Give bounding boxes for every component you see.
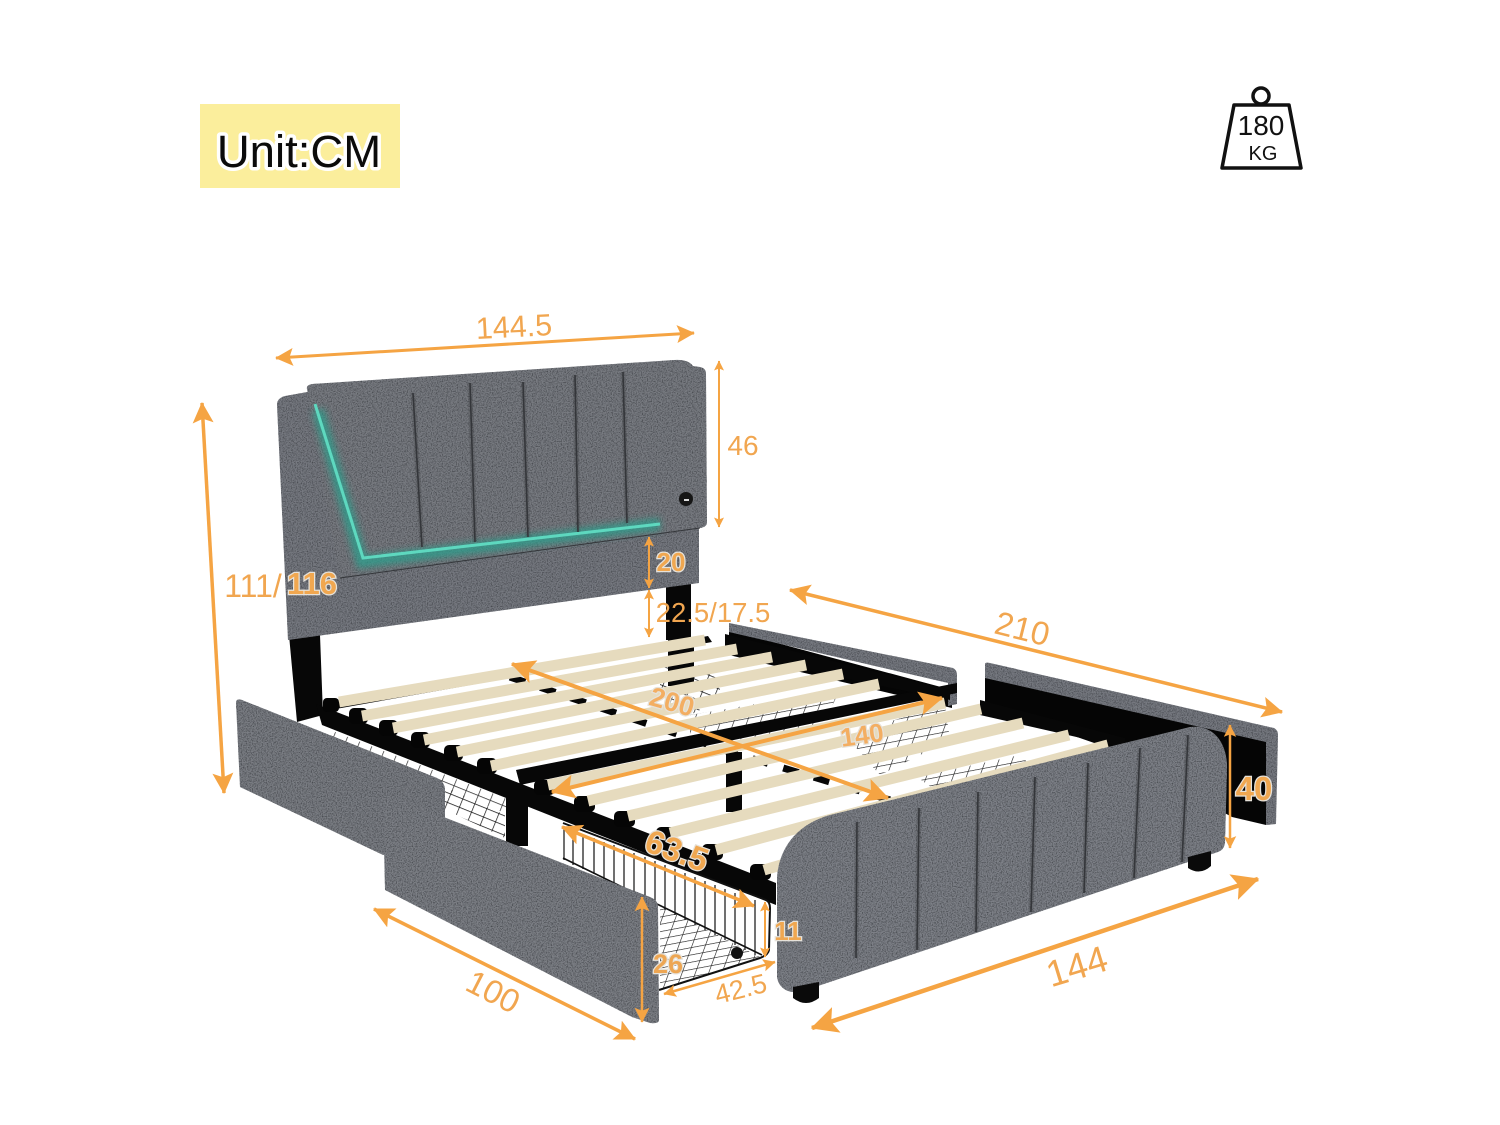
wire drawer basket — [563, 823, 770, 990]
dimension: headboard width 144.5: 144.5 — [475, 308, 553, 346]
wooden slats — [339, 640, 1150, 870]
dimension: inner width 140 — [552, 698, 942, 792]
headboard legs — [289, 578, 742, 812]
dimension: side length 210: 210 — [991, 604, 1054, 653]
dimension: basket length 63.5: 63.5 — [640, 822, 713, 879]
dimension: drawer height 26 — [642, 897, 683, 1022]
dimension: 20 — [649, 537, 685, 588]
unit label — [200, 104, 400, 188]
dimension: footboard width 144: 144 — [1041, 938, 1112, 995]
dimension: clearance 22.5/17.5: 22.5/17.5 — [656, 597, 770, 628]
icon: weight capacity 180 KG: 180 — [1238, 110, 1284, 141]
dimension: total height 111/116: 111/ — [224, 568, 282, 604]
dimension: upper headboard height 46: 46 — [727, 430, 759, 461]
dimension: drawer height 26: 26 — [653, 949, 683, 979]
dimension: drawer length 100 — [374, 909, 635, 1039]
dimension: headboard width 144.5 — [276, 308, 694, 358]
icon: power button — [679, 492, 693, 506]
dimension: total height 111/116: 116 — [287, 566, 337, 601]
footboard feet — [793, 851, 1211, 1003]
dimension: drawer length 100: 100 — [460, 963, 526, 1021]
unit label: Unit:CM — [217, 126, 381, 177]
dimension: total height 111/116 — [202, 403, 337, 793]
dimension: basket height 11: 11 — [774, 916, 802, 946]
dimension: slat length 200: 200 — [646, 681, 698, 723]
dimension: footboard width 144 — [812, 879, 1258, 1028]
dimension: side length 210 — [790, 590, 1282, 712]
dimension: basket length 63.5 — [562, 822, 754, 906]
footboard — [777, 727, 1227, 1003]
icon: weight capacity 180 KG: KG — [1249, 143, 1277, 165]
far side drawer fronts — [729, 623, 1278, 825]
bed illustration — [236, 360, 1278, 1023]
baskets under the frame — [330, 665, 1030, 838]
dimension: footboard height 40 — [1230, 725, 1272, 848]
bed frame rails — [316, 634, 1125, 905]
dimension: clearance 22.5/17.5 — [649, 590, 770, 637]
dimension: 20: 20 — [657, 547, 685, 577]
dimension: inner width 140: 140 — [838, 717, 886, 753]
dimension: slat length 200 — [512, 664, 888, 798]
dimension: basket width 42.5 — [664, 962, 775, 1010]
dimension: basket width 42.5: 42.5 — [712, 968, 770, 1010]
icon: weight capacity 180 KG — [1222, 88, 1301, 168]
dimension: footboard height 40: 40 — [1236, 770, 1272, 807]
headboard — [277, 360, 707, 640]
left drawers — [236, 699, 659, 1023]
dimension: basket height 11 — [765, 902, 802, 957]
